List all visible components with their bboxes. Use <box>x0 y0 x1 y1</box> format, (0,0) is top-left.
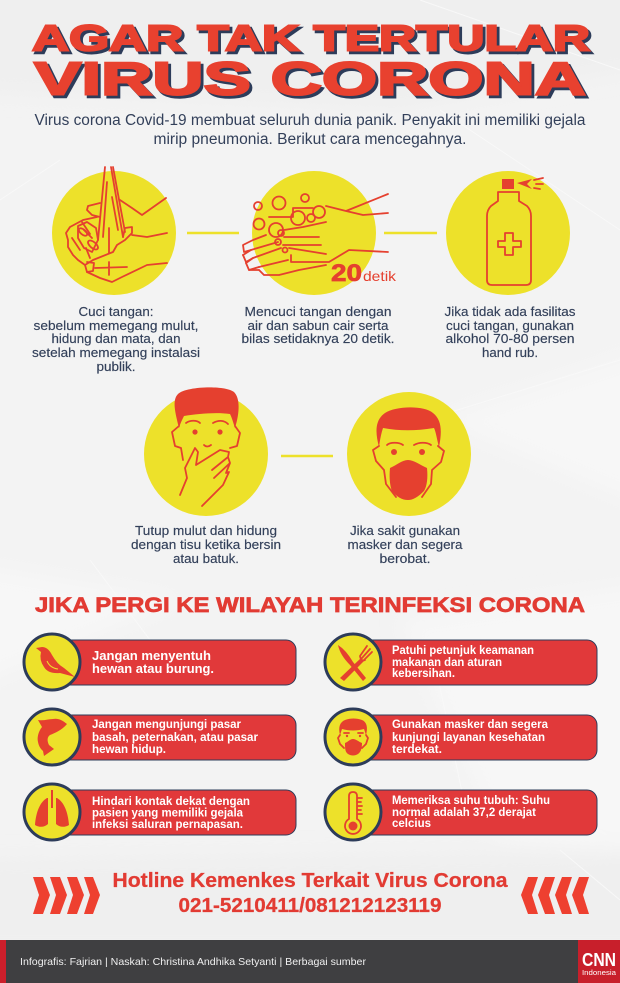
card: masks and clinic: Gunakan masker dan segera <box>392 719 549 731</box>
hotline text: Hotline Kemenkes Terkait Virus Corona <box>112 869 508 892</box>
label: 20 detik <box>331 260 397 287</box>
card: animals: hewan atau burung. <box>92 661 214 676</box>
card: animals <box>24 634 296 690</box>
card: body temperature: celcius <box>392 818 431 830</box>
title: AGAR TAK TERTULAR <box>34 20 592 61</box>
step: alcohol hand rub spray <box>446 171 570 295</box>
label: 20 detik: detik <box>363 268 397 284</box>
arrows: left chevrons <box>33 877 100 914</box>
card: masks and clinic: terdekat. <box>392 744 442 756</box>
card: contact: Hindari kontak dekat dengan <box>92 796 250 808</box>
captions for steps: berobat. <box>380 551 430 566</box>
arrows: right chevrons <box>521 877 589 914</box>
card: food safety <box>325 634 597 690</box>
captions for steps: atau batuk. <box>173 551 239 566</box>
card: contact: pasien yang memiliki gejala <box>92 808 244 820</box>
intro text: mirip pneumonia. Berikut cara mencegahnya. <box>154 131 466 148</box>
step: wear a mask <box>347 392 471 516</box>
captions for steps: Mencuci tangan dengan <box>244 304 392 319</box>
title <box>32 18 592 107</box>
captions for steps <box>32 304 576 566</box>
section heading: JIKA PERGI KE WILAYAH TERINFEKSI CORONA <box>35 594 585 617</box>
card: food safety: makanan dan aturan <box>392 657 502 669</box>
logo: CNN Indonesia <box>582 950 617 977</box>
captions for steps: Jika tidak ada fasilitas <box>444 304 576 319</box>
title: AGAR TAK TERTULAR <box>32 18 590 58</box>
captions for steps: alkohol 70-80 persen <box>446 331 574 346</box>
label: 20 detik: 20 <box>331 260 362 287</box>
captions for steps: masker dan segera <box>348 537 463 552</box>
captions for steps: cuci tangan, gunakan <box>446 318 574 333</box>
connector lines <box>187 233 437 456</box>
card: body temperature <box>325 784 597 840</box>
card: contact: infeksi saluran pernapasan. <box>92 819 243 831</box>
card: body temperature: Memeriksa suhu tubuh: Suhu <box>392 795 550 807</box>
card: body temperature: normal adalah 37,2 derajat <box>392 807 536 819</box>
card: contact <box>24 784 296 840</box>
intro text: Virus corona Covid-19 membuat seluruh dunia panik. Penyakit ini memiliki gejala <box>34 112 586 129</box>
captions for steps: publik. <box>96 359 136 374</box>
captions for steps: Tutup mulut dan hidung <box>135 523 277 538</box>
step: soap and rub hands <box>243 171 397 295</box>
captions for steps: sebelum memegang mulut, <box>34 318 198 333</box>
title: VIRUS CORONA <box>34 52 586 104</box>
card: food safety: Patuhi petunjuk keamanan <box>392 645 534 657</box>
captions for steps: bilas setidaknya 20 detik. <box>242 331 394 346</box>
hotline text <box>112 869 508 917</box>
captions for steps: Cuci tangan: <box>78 304 154 319</box>
card: masks and clinic: kunjungi layanan kesehatan <box>392 732 545 744</box>
card: markets: Jangan mengunjungi pasar <box>92 719 242 731</box>
card: markets <box>24 709 296 765</box>
card: food safety: kebersihan. <box>392 668 455 680</box>
card: animals: Jangan menyentuh <box>92 648 211 663</box>
card: markets: hewan hidup. <box>92 744 166 756</box>
card: masks and clinic <box>325 709 597 765</box>
card: markets: basah, peternakan, atau pasar <box>92 732 259 744</box>
captions for steps: hand rub. <box>482 345 538 360</box>
step: cover mouth and nose <box>144 387 268 516</box>
logo: CNN Indonesia: CNN <box>582 950 616 970</box>
footer bar: Infografis: Fajrian | Naskah: Christina Andhika Setyanti | Berbagai sumber <box>20 956 366 968</box>
logo: CNN Indonesia: Indonesia <box>582 968 617 977</box>
captions for steps: setelah memegang instalasi <box>32 345 200 360</box>
captions for steps: Jika sakit gunakan <box>350 523 460 538</box>
captions for steps: hidung dan mata, dan <box>52 331 180 346</box>
title: VIRUS CORONA <box>36 55 588 107</box>
captions for steps: air dan sabun cair serta <box>248 318 389 333</box>
footer bar <box>0 940 620 983</box>
captions for steps: dengan tisu ketika bersin <box>131 537 281 552</box>
hotline text: 021-5210411/081212123119 <box>178 894 442 917</box>
intro text <box>34 112 586 148</box>
step: washing hands under water <box>52 167 176 295</box>
